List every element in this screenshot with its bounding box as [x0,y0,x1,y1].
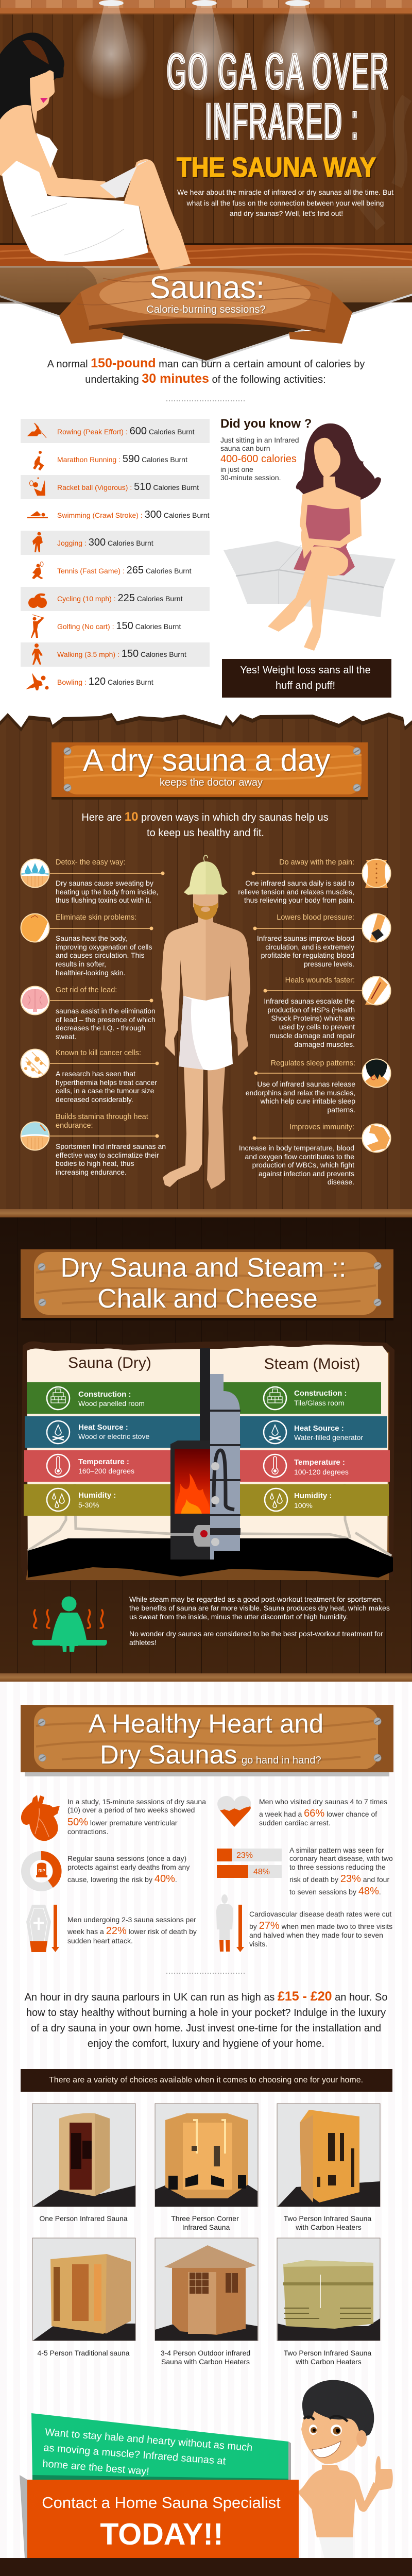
fact: temperature [47,1454,134,1477]
benefit: skin: results in softer, [56,960,106,968]
benefit: cancer: cells, in a case the tumour size [56,1087,154,1095]
stat: sudden cardiac arrest: a week had a 66% lower chance of [259,1808,377,1819]
thumb up [374,2456,393,2490]
benefit: skin: Eliminate skin problems: [56,913,136,922]
benefit: stamina: Sportsmen find infrared saunas an [56,1142,166,1150]
benefit: cancer: A research has seen that [56,1070,135,1078]
row: cycling [28,592,183,608]
row: tennis [32,562,192,579]
fact: construction: Construction : [78,1390,131,1399]
steam vs sauna text: us sweat from the inside, minus the utter discomfort of high humidity. [129,1613,348,1621]
stat: early deaths [26,1854,190,1887]
wood wall [0,14,412,245]
room lines [28,1484,391,1556]
stat: sudden cardiac arrest: sudden cardiac arrest. [259,1819,331,1827]
towel [317,2530,353,2558]
illustration: woman in pink towel on bench [224,423,396,651]
benefit: sleep [246,1059,391,1114]
fact: heat source: Wood or electric stove [78,1432,149,1440]
fact: heat source [47,1421,149,1444]
product: outdoor sauna: 3-4 Person Outdoor infrared [161,2349,250,2357]
fact text: sauna can burn [220,444,270,452]
icon: filled heart [217,1796,251,1827]
section: healthy heart background [0,1682,412,2558]
green band [27,1382,381,1414]
icon: wound [363,977,390,1005]
brows [304,2416,348,2421]
row: swimming: Swimming (Crawl Stroke) : 300 Calories Burnt [57,509,210,520]
panel: comparison scene [21,1341,394,1582]
benefits: left column [21,858,166,1176]
benefit: lead [21,986,156,1041]
benefit: lead: sweat. [56,1032,76,1041]
stat: early deaths: protects against early deaths from any [67,1863,190,1871]
product: three person corner [155,2104,258,2231]
hair [302,2380,374,2439]
product: three person corner: Three Person Corner [171,2214,239,2223]
fact: heat source [264,1421,363,1444]
stat: coronary heart disease: risk of death by 23% and four [289,1873,389,1885]
fact: construction: Construction : [294,1389,347,1398]
stat: sudden heart attack: Men undergoing 2-3 sauna sessions per [67,1916,196,1924]
row: rowing [28,423,195,438]
sign: dry sauna and steam [21,1249,393,1320]
ear [356,2430,367,2447]
text block: cost of sauna parlours: enjoy the comfort, luxury and hygiene of your home. [88,2038,324,2049]
stat: sudden heart attack: sudden heart attack. [67,1937,133,1945]
benefit: skin: Saunas heat the body, [56,934,127,942]
heading: A dry sauna a day [83,743,330,777]
benefit: sleep: Use of infrared saunas release [257,1080,355,1088]
illustration: man with sauna hat [161,855,250,1189]
stat: sudden heart attack [26,1905,197,1952]
stat: cardiovascular disease: and halved when they made four to seven [249,1931,383,1939]
fact: humidity: 5-30% [78,1501,99,1509]
body [299,2465,382,2537]
woman in white towel [0,32,191,304]
hero paragraph: and dry saunas? Well, let's find out! [230,209,343,217]
benefit: wounds: Infrared saunas escalate the [264,997,355,1005]
olive band [24,1484,389,1516]
stat: premature contractions: In a study, 15-minute sessions of dry sauna [67,1798,206,1806]
icon: back [363,859,390,888]
hair [296,423,381,500]
stat: cardiovascular disease: by 27% when men made two to three visits [249,1920,392,1931]
row: bowling: Bowling : 120 Calories Burnt [57,676,153,687]
fact: humidity [265,1488,332,1511]
arm across [301,515,359,559]
product: traditional sauna: 4-5 Person Traditional sauna [37,2349,130,2357]
fact: construction: Tile/Glass room [294,1399,345,1407]
icon: stamina [21,1122,49,1150]
steam vs sauna text [129,1595,390,1647]
fact text: 30-minute session. [220,473,281,482]
icon: person sitting in steam [32,1596,107,1652]
benefit: wounds: muscle damage and repair [269,1031,355,1040]
row: golfing [31,615,181,638]
benefit: detox: heating up the body from inside, [56,888,158,896]
icon: coffin [26,1905,59,1952]
benefit: detox: Detox- the easy way: [56,858,125,867]
heading: Dry Sauna and Steam :: [61,1253,346,1283]
sign: healthy heart: go hand in hand? [242,1755,321,1766]
corner bench [224,541,396,617]
product: two person carbon heaters: with Carbon Heaters [295,2358,362,2366]
neck and shoulder [0,105,116,198]
hero paragraph [177,188,393,217]
benefit: skin: healthier-looking skin. [56,969,125,977]
chart: percentage bars: 23% [236,1851,253,1860]
eyes [309,2425,342,2436]
intro: 10 proven ways: Here are 10 proven ways in which dry saunas help us [81,810,329,824]
footer [0,2558,412,2576]
column titles [68,1354,360,1372]
leg [124,159,191,271]
row: rowing: Rowing (Peak Effort) : 600 Calories Burnt [57,426,195,437]
ceiling [0,0,412,14]
row: walking: Walking (3.5 mph) : 150 Calories Burnt [57,648,186,659]
row: golfing: Golfing (No cart) : 150 Calories Burnt [57,620,181,632]
section: dry sauna and steam background [0,1217,412,1682]
sign: dry sauna and steam: Chalk and Cheese [97,1284,318,1314]
right facts [264,1387,363,1511]
beard [194,903,218,920]
fact: heat source: Water-filled generator [294,1433,363,1442]
product: two person carbon heaters [277,2238,380,2366]
arms and torso [161,912,206,1056]
benefit: immunity: disease. [328,1178,354,1186]
row: cycling: Cycling (10 mph) : 225 Calories Burnt [57,592,183,604]
icon: dna [21,1049,49,1078]
face [193,886,218,917]
fact: temperature: 160–200 degrees [78,1467,134,1475]
benefit: cancer [21,1049,159,1104]
callout: stay hale and hearty [31,2413,291,2481]
fact: temperature: Temperature : [78,1458,129,1466]
benefit: immunity: and oxygen flow contributes to the [245,1153,354,1161]
callout: stay hale and hearty: Want to stay hale and hearty without as much [45,2427,253,2453]
stat: cardiovascular disease: visits. [249,1940,267,1948]
benefit: immunity: Improves immunity: [289,1123,354,1131]
fact: humidity: 100% [294,1501,313,1510]
hat [184,861,206,895]
fact: humidity: Humidity : [294,1492,332,1500]
stat: coronary heart disease [217,1846,393,1897]
product: three person corner: Infrared Sauna [182,2223,230,2231]
illustration: smiling man thumbs up [299,2380,393,2558]
benefit: blood pressure: Infrared saunas improve blood [257,934,354,942]
benefit: pain [238,858,390,904]
icon: man silhouette [216,1894,244,1952]
bench [0,243,412,363]
spotlights [74,0,335,100]
product: one person infrared sauna [32,2104,135,2223]
legs and feet [163,1066,203,1187]
bench shadow [0,266,98,304]
callout: weight loss: huff and puff! [276,680,335,691]
intro: 10 proven ways [81,810,329,839]
stat: coronary heart disease: A similar pattern was seen for [289,1846,384,1854]
benefit: wounds: damaged muscles. [294,1040,355,1048]
fact: temperature [264,1454,349,1477]
row: walking [32,643,186,665]
benefit: sleep: Regulates sleep patterns: [271,1059,355,1067]
callout: stay hale and hearty: home are the best way! [42,2458,150,2478]
blue band [25,1416,387,1448]
benefit: wounds [264,976,390,1048]
intro: 10 proven ways: to keep us healthy and fit. [147,827,264,839]
benefit: lead: Get rid of the lead: [56,986,117,994]
body [300,477,362,547]
section: dry sauna a day background [0,713,412,1217]
benefit: immunity: against infection and prevents [259,1170,354,1178]
benefit: pain: One infrared sauna daily is said to [245,879,354,887]
chart: percentage bars: 48% [253,1868,270,1876]
benefit: sleep: endorphins and relax the muscles, [246,1089,355,1097]
heading: Did you know ? [220,417,312,431]
sign: healthy heart: Dry Saunas [100,1740,237,1769]
benefit: pain: relieve tension and relaxes muscles, [238,888,354,896]
bar: variety of choices: There are a variety of choices available when it comes to choosing one for your home. [49,2076,363,2084]
smile [312,2441,341,2458]
fact: heat source: Heat Source : [78,1423,128,1432]
product: two person infrared sauna: with Carbon Heaters [295,2223,362,2231]
callout: weight loss [222,659,391,698]
sign: healthy heart [21,1705,393,1776]
product: traditional sauna [32,2238,135,2357]
product: outdoor sauna: Sauna with Carbon Heaters [161,2358,250,2366]
hero paragraph: We hear about the miracle of infrared or dry saunas all the time. But [177,188,393,196]
stat: cardiovascular disease [216,1894,392,1952]
column titles: Sauna (Dry) [68,1354,151,1371]
fact: temperature: 100-120 degrees [294,1468,349,1476]
callout: weight loss: Yes! Weight loss sans all the [240,665,371,676]
benefit: stamina: effective way to acclimatize their [56,1151,159,1159]
stat: premature contractions: 50% lower premature ventricular [67,1817,178,1828]
benefit: cancer: hyperthermia helps treat cancer [56,1078,157,1087]
panel: did you know [220,417,312,482]
row: racketball [30,477,199,496]
text block: cost of sauna parlours: how to stay healthy without burning a hole in your pocket? Indulge in the luxury [26,2007,386,2019]
benefit: lead: saunas assist in the elimination [56,1007,156,1015]
product: two person infrared sauna: Two Person Infrared Sauna [284,2214,371,2223]
fact text [220,436,299,482]
row: marathon: Marathon Running : 590 Calories Burnt [57,453,187,465]
fact: construction [47,1387,145,1410]
intro calories text: undertaking 30 minutes of the following activities: [85,371,326,386]
steam vs sauna text: the benefits of sauna are far more visible. Sauna produces dry heat, which makes [129,1604,390,1612]
sign subheading: Calorie-burning sessions? [146,304,266,315]
heading: A Healthy Heart and [89,1709,323,1738]
benefit: blood pressure: profitable for regulating blood [261,951,354,959]
list: activities and calories [21,419,210,690]
row: bowling [26,673,153,690]
icon: blood pressure [363,914,390,942]
steam vs sauna text: While steam may be regarded as a good post-workout treatment for sportsmen, [129,1595,383,1603]
benefit: sleep: which help cure irritable sleep [260,1097,355,1105]
call to action [20,2475,299,2558]
chart: donut 40 percent [26,1855,57,1887]
benefit: skin [21,913,153,977]
stat: sudden cardiac arrest [217,1796,387,1827]
benefit: wounds: used by cells to prevent [279,1023,355,1031]
text block: cost of sauna parlours: of a dry sauna in your own home. Just invest one-time for the installation and [31,2023,381,2034]
benefit: stamina [21,1113,166,1176]
benefit: wounds: Shock Proteins) which are [271,1014,355,1022]
benefit: wounds: Heals wounds faster: [285,976,355,985]
benefit: immunity: production of WBCs, which fight [252,1161,354,1169]
red band [24,1450,390,1482]
benefits: right column [238,858,391,1186]
stove [170,1348,241,1560]
row: racketball: Racket ball (Vigorous) : 510 Calories Burnt [57,481,199,493]
towel over thigh [100,160,149,198]
column titles: Steam (Moist) [264,1355,360,1372]
row: jogging [32,532,153,552]
fact text: Just sitting in an Infrared [220,436,299,444]
icon: water drops [21,859,49,888]
pink towel [294,505,355,575]
row: tennis: Tennis (Fast Game) : 265 Calories Burnt [57,565,192,576]
call to action: Contact a Home Sauna Specialist [42,2494,281,2512]
lips [40,98,48,103]
floor [28,1538,393,1578]
sign: a dry sauna a day [52,742,368,800]
icon: brain [21,986,49,1015]
benefit: blood pressure: pressure levels. [304,960,354,968]
bangs [28,39,64,80]
fact: humidity: Humidity : [78,1491,116,1500]
crossed thigh [310,546,348,576]
cream wall [27,1345,388,1566]
icon: anatomical heart [21,1795,60,1841]
chest towel [36,133,58,168]
lower towel [2,161,148,262]
text block: cost of sauna parlours [25,1989,387,2049]
benefit: cancer: Known to kill cancer cells: [56,1049,141,1057]
callout: stay hale and hearty: as moving a muscle? Infrared saunas at [43,2442,226,2467]
section: hero [0,0,412,363]
benefit: blood pressure: circulation, and is extremely [265,943,354,951]
benefit: detox: thus flushing toxins out with it. [56,896,151,904]
hair back [0,32,64,129]
text block: cost of sauna parlours: An hour in dry sauna parlours in UK can run as high as £15 - £20 an hour. So [25,1989,387,2004]
towel [179,996,233,1070]
steam vs sauna text: athletes! [129,1638,157,1647]
benefit: skin: improving oxygenation of cells [56,943,152,951]
benefit: blood pressure [253,913,390,968]
stat: premature contractions: contractions. [67,1827,108,1836]
benefit: immunity [239,1123,390,1186]
intro calories text [47,356,365,386]
left facts [47,1387,149,1511]
benefit: lead: of lead – the presence of which [56,1015,156,1024]
legs [268,551,323,632]
benefit: detox: Dry saunas cause sweating by [56,879,153,887]
fact: heat source: Heat Source : [294,1424,344,1433]
stat: early deaths: cause, lowering the risk by 40%. [67,1873,177,1885]
benefit: stamina: bodies to high heat, thus [56,1159,134,1167]
benefit: stamina: endurance: [56,1122,93,1130]
product: one person infrared sauna: One Person Infrared Sauna [39,2214,128,2223]
benefit: cancer: decreased considerably. [56,1095,133,1104]
frame [21,1341,394,1582]
row backgrounds [21,419,210,667]
title line 2: INFRARED : [205,94,359,150]
product: outdoor sauna [155,2238,258,2366]
sign heading: Saunas: [149,270,265,305]
face [30,70,55,124]
benefit: blood pressure: Lowers blood pressure: [277,913,354,922]
benefit: skin: and causes circulation. This [56,951,144,959]
product: two person infrared sauna [277,2104,380,2231]
steam vs sauna text: No wonder dry saunas are considered to be the best post-workout treatment for [129,1630,383,1638]
face [301,2409,363,2464]
fact: temperature: Temperature : [294,1458,345,1467]
chart: percentage bars [217,1849,282,1878]
sign: saunas [59,268,352,344]
stat: coronary heart disease: coronary heart disease, with two [289,1854,393,1862]
chart: donut 40 percent: RIP [38,1869,45,1873]
stat: coronary heart disease: to three sessions reducing the [289,1863,386,1871]
stat: premature contractions [21,1795,206,1841]
fact: humidity [47,1488,116,1511]
face [314,438,340,478]
benefit: pain: Do away with the pain: [279,858,354,867]
benefit: lead: decreases the I.Q. - through [56,1024,145,1032]
benefit: wounds: production of HSPs (Health [267,1006,355,1014]
fact text: in just one [220,465,253,473]
title [167,44,390,150]
stat: premature contractions: (10) over a period of two weeks showed [67,1806,195,1814]
row: marathon [34,451,187,470]
product: two person carbon heaters: Two Person Infrared Sauna [284,2349,371,2357]
stat: sudden heart attack: week has a 22% lower risk of death by [67,1925,197,1937]
icon: skin [21,913,49,942]
stat: sudden cardiac arrest: Men who visited dry saunas 4 to 7 times [259,1798,387,1806]
fact text: 400-600 calories [220,453,297,465]
subheading: keeps the doctor away [160,777,263,788]
icon: neck [362,1059,391,1088]
subtitle: the sauna way: THE SAUNA WAY [177,152,376,183]
benefit: immunity: Increase in body temperature, blood [239,1144,354,1152]
intro calories text: A normal 150-pound man can burn a certain amount of calories by [47,356,365,370]
icon: muscle [363,1124,390,1152]
benefit: stamina: Builds stamina through heat [56,1113,148,1121]
benefit: stamina: increasing endurance. [56,1168,127,1176]
fact: construction [264,1387,347,1410]
title line 1: GO GA GA OVER [167,44,390,100]
hero paragraph: what is all the fuss on the connection between your well being [186,199,384,207]
fact: construction: Wood panelled room [78,1399,145,1408]
row: jogging: Jogging : 300 Calories Burnt [57,537,153,548]
benefit: sleep: patterns. [328,1106,355,1114]
call to action: TODAY!! [100,2517,224,2551]
steam wisps [356,77,407,227]
benefit: detox [21,858,165,904]
stat: cardiovascular disease: Cardiovascular disease death rates were cut [249,1910,391,1918]
stat: early deaths: Regular sauna sessions (once a day) [67,1854,186,1862]
bar: variety of choices [21,2069,392,2092]
stat: coronary heart disease: to seven sessions by 48%. [289,1886,381,1897]
benefit: pain: thus relieving your body from pain. [244,896,354,904]
